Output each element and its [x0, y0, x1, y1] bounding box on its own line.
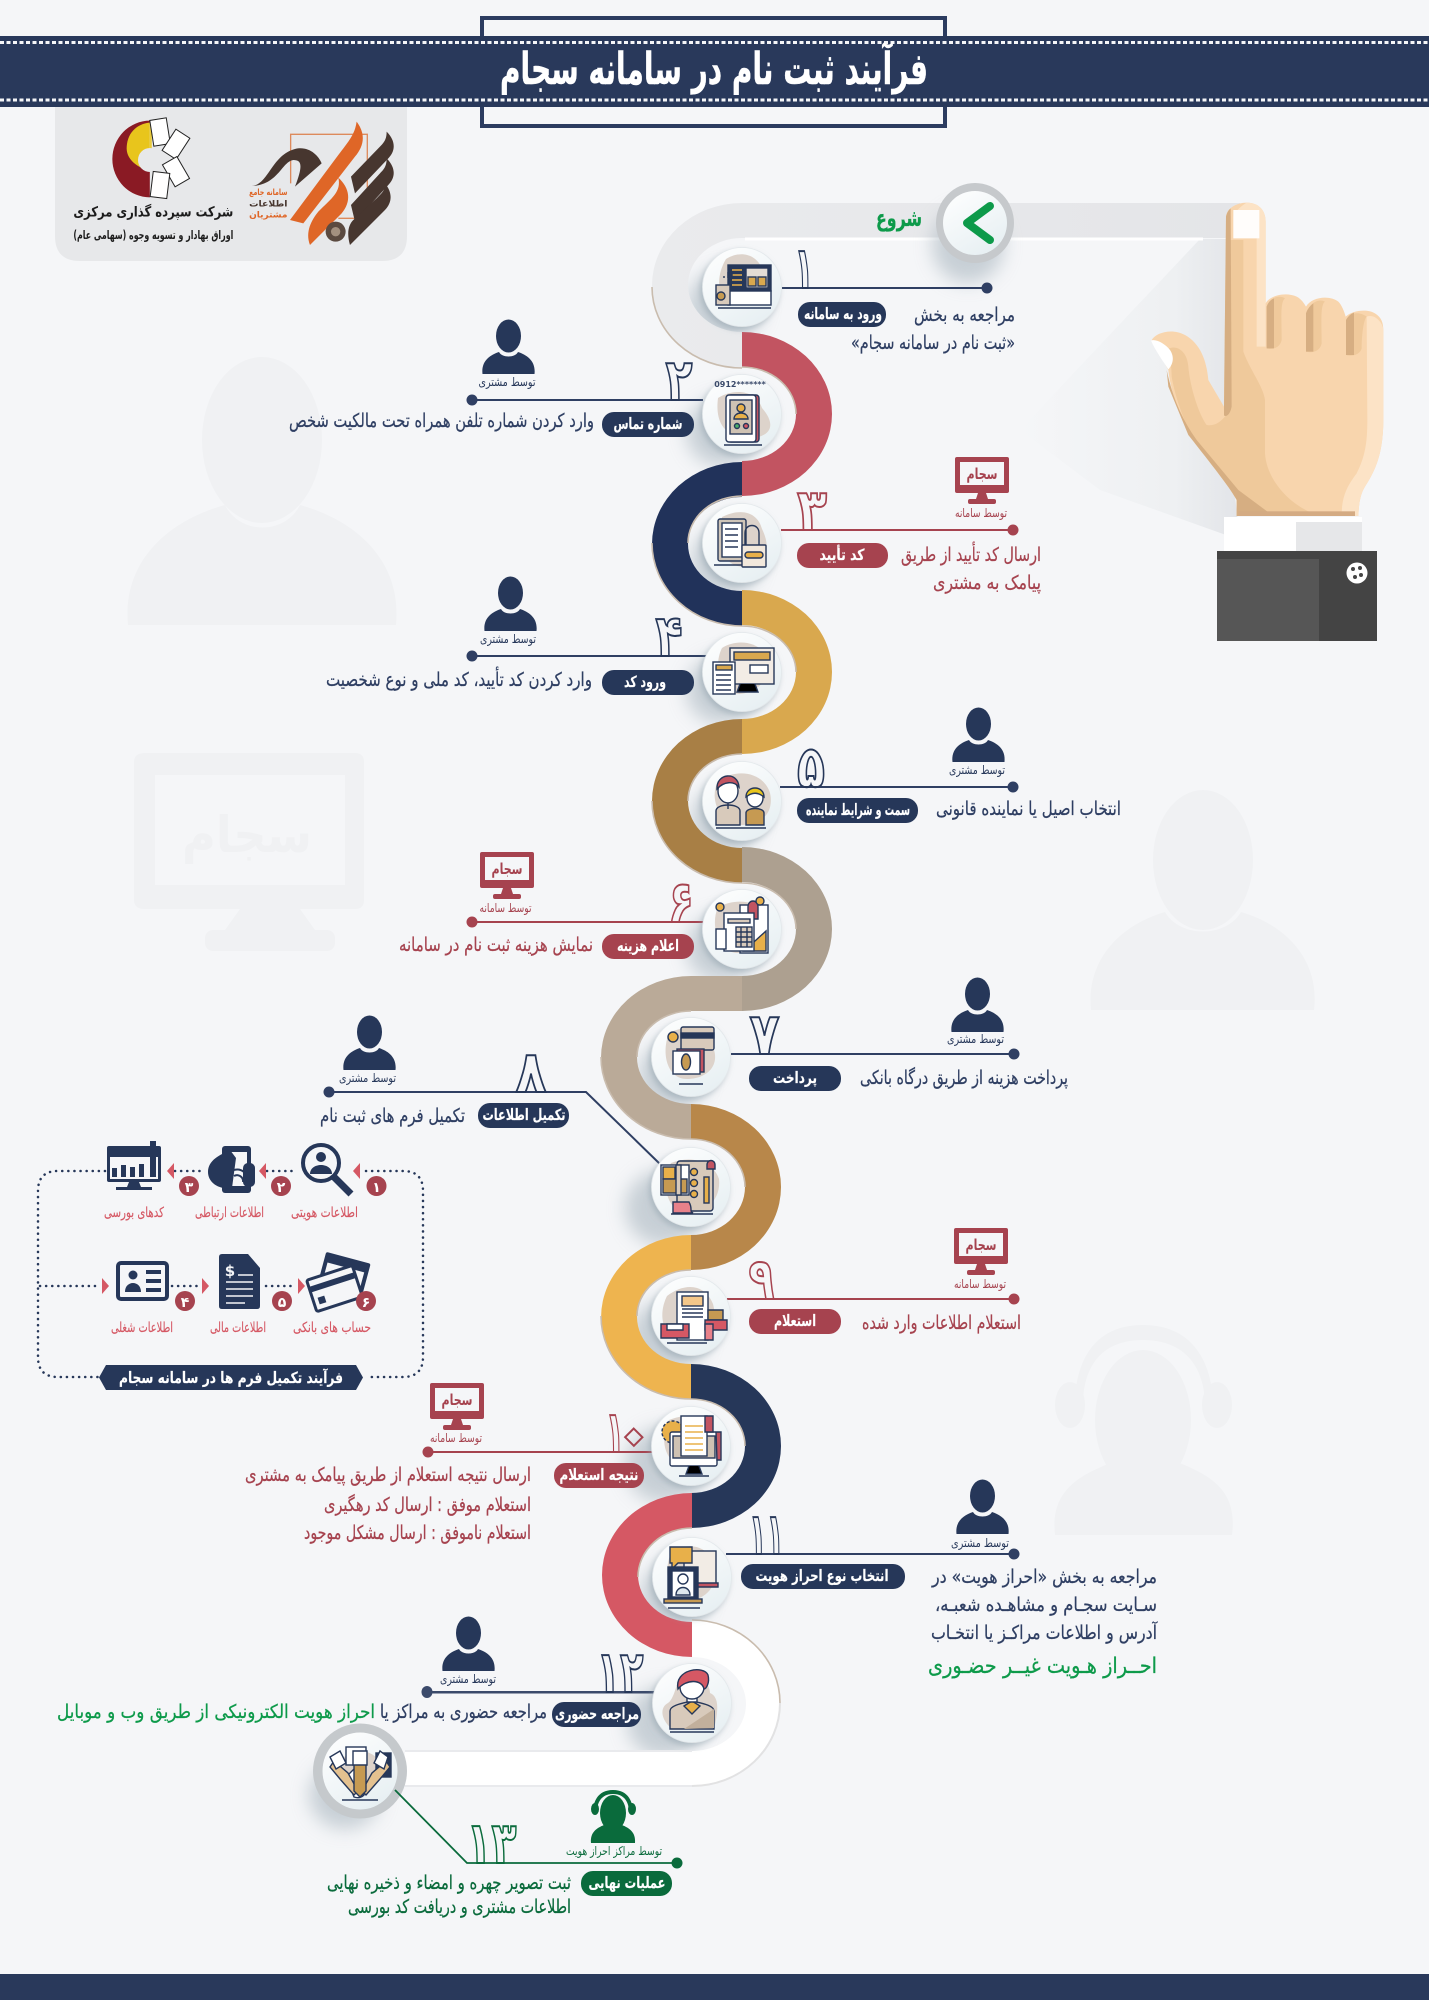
step 1	[702, 234, 1015, 354]
step 1 number: ۱	[794, 234, 814, 302]
step 1 pill	[798, 302, 886, 327]
step 11 connector line	[726, 1548, 1020, 1560]
step 9 text: استعلام اطلاعات وارد شده	[862, 1312, 1021, 1334]
step 3 text: ارسال کد تأیید از طریق	[901, 541, 1041, 566]
step 10 text: ارسال نتیجه استعلام از طریق پیامک به مشتری	[245, 1464, 531, 1486]
step 1 text	[851, 304, 1015, 354]
step 11 text: مراجعه به بخش «احراز هویت» در	[931, 1566, 1157, 1588]
watermark: person right	[1091, 790, 1315, 1010]
step 8 actor: customer	[339, 1016, 396, 1086]
step 10	[245, 1383, 730, 1544]
step 1 node icon	[702, 248, 782, 326]
step 4 actor: customer: توسط مشتری	[480, 632, 536, 647]
step 6 text: نمایش هزینه ثبت نام در سامانه	[399, 934, 593, 956]
item 4: job info: اطلاعات شغلی	[111, 1320, 173, 1336]
step 8 pill: تکمیل اطلاعات	[482, 1106, 566, 1124]
item 2: contact info: ۲	[277, 1180, 286, 1196]
step 9 pill	[749, 1309, 841, 1334]
step 10 number: ۱	[606, 1398, 624, 1466]
step 6 actor: system	[480, 852, 534, 916]
panel: form completion process	[38, 1141, 423, 1390]
step 6 pill	[602, 934, 694, 959]
step 2	[289, 320, 782, 454]
step 3 number: ۳	[797, 476, 827, 544]
step 6 node icon	[702, 890, 782, 968]
dotted frame	[38, 1171, 423, 1377]
shirt cuff	[1224, 517, 1362, 551]
item 6: bank accounts: ۶	[362, 1295, 370, 1311]
step 9 actor: system: توسط سامانه	[954, 1277, 1006, 1292]
step 7 pill	[749, 1066, 841, 1091]
ribbon: segment 4 to 5	[652, 719, 742, 883]
step 12 actor: customer: توسط مشتری	[440, 1672, 496, 1687]
logo: sejam: مشتریان	[249, 210, 287, 220]
logo: central securities depository: شرکت سپرده گذاری مرکزی	[73, 204, 233, 221]
step 11 actor: customer	[951, 1480, 1009, 1551]
step 2 connector line	[466, 394, 703, 406]
watermark: monitor	[134, 753, 364, 951]
step 8 connector line	[324, 1086, 661, 1165]
watermark: person left	[127, 357, 397, 625]
step 3 connector line	[781, 524, 1018, 536]
process banner	[99, 1365, 363, 1390]
ribbon: segment 7 to 8	[691, 1104, 781, 1270]
step 13 connector line	[395, 1790, 682, 1868]
step 13 actor: verification center: توسط مراکز احراز هویت	[566, 1844, 662, 1859]
start button	[876, 183, 1014, 283]
step 8 node icon	[652, 1148, 730, 1226]
step 3 pill: کد تأیید	[820, 545, 865, 564]
step 6 actor: system: سجام	[492, 860, 522, 878]
hand	[1151, 203, 1383, 516]
ribbon: segment 2 to 3	[652, 462, 742, 626]
step 10 text	[245, 1464, 531, 1544]
item 5: financial info: اطلاعات مالی	[210, 1320, 266, 1336]
logo: sejam	[249, 122, 394, 245]
step 13 number: ۱۳	[466, 1809, 516, 1877]
step 12 pill	[552, 1702, 641, 1727]
step 5	[702, 708, 1121, 840]
item 5: financial info: ۵	[278, 1295, 287, 1311]
step 10 node icon	[652, 1406, 730, 1486]
step 1 text: مراجعه به بخش	[914, 304, 1015, 326]
step 11 text: آدرس و اطلاعات مراکـز یا انتخـاب	[931, 1620, 1158, 1644]
step 9 node icon	[652, 1276, 730, 1356]
ribbon: segment 8 to 9	[601, 1235, 691, 1399]
item 1: identity info	[291, 1145, 386, 1221]
step 9 connector line	[727, 1294, 1020, 1304]
step 12 text: مراجعه حضوری به مراکز یا	[380, 1701, 547, 1723]
step 12 number: ۱۲	[596, 1638, 644, 1706]
ribbon: segment 10 to 11	[602, 1493, 692, 1657]
step 7 pill: پرداخت	[773, 1069, 817, 1088]
footer band	[0, 1974, 1429, 2000]
header: navy band with dashed lines	[0, 36, 1429, 107]
step 9 pill: استعلام	[774, 1312, 816, 1330]
step 5 number: ۵	[797, 733, 825, 801]
step 12 pill: مراجعه حضوری	[555, 1705, 639, 1723]
step 9 actor: system: سجام	[966, 1236, 996, 1254]
logo: central securities depository: اوراق بهادار و تسویه وجوه (سهامی عام)	[73, 228, 233, 243]
hand cast shadow	[1020, 239, 1240, 540]
step 12 node icon	[652, 1664, 732, 1742]
step 2 actor: customer: توسط مشتری	[478, 375, 536, 390]
step 6 pill: اعلام هزینه	[617, 937, 679, 955]
step 4 number: ۴	[656, 602, 682, 670]
step 7 actor: customer: توسط مشتری	[947, 1032, 1004, 1047]
ribbon: segment 9 to 10	[691, 1364, 781, 1528]
step 11 pill	[741, 1564, 905, 1589]
item 6: bank accounts: حساب های بانکی	[293, 1320, 371, 1336]
ribbon edge highlights	[601, 367, 796, 1577]
panel: logos	[55, 107, 407, 261]
step 3 text: پیامک به مشتری	[933, 572, 1041, 594]
step 1 text: «ثبت نام در سامانه سجام»	[851, 332, 1015, 354]
step 10 actor: system: توسط سامانه	[430, 1431, 482, 1446]
step 7 number: ۷	[750, 1000, 780, 1068]
step 5 text: انتخاب اصیل یا نماینده قانونی	[936, 798, 1121, 820]
step 3 actor: system: توسط سامانه	[955, 506, 1007, 521]
step 5 actor: customer	[949, 708, 1005, 778]
ribbon: segment 1 to 2	[742, 332, 832, 496]
step 11 text: احــراز هـویت غیــر حضـوری	[928, 1654, 1157, 1679]
step 10 text: استعلام ناموفق : ارسال مشکل موجود	[304, 1522, 531, 1544]
watermark: monitor: سجام	[182, 806, 312, 864]
step 4 text: وارد کردن کد تأیید، کد ملی و نوع شخصیت	[326, 666, 592, 691]
arrows	[102, 1163, 360, 1294]
step 11 pill: انتخاب نوع احراز هویت	[756, 1567, 888, 1585]
item 1: identity info: اطلاعات هویتی	[291, 1205, 358, 1221]
ribbon: segment 3 to 4	[742, 590, 832, 754]
step 8	[320, 1016, 730, 1226]
step 4 actor: customer	[480, 576, 537, 647]
step 13 text: ثبت تصویر چهره و امضاء و ذخیره نهایی	[327, 1872, 571, 1894]
step 7 text: پرداخت هزینه از طریق درگاه بانکی	[860, 1066, 1068, 1089]
step 10 actor: system: سجام	[442, 1391, 472, 1409]
step 5 pill: سمت و شرایط نماینده	[806, 801, 910, 819]
step 7	[652, 978, 1068, 1096]
step 13 actor: verification center	[566, 1790, 662, 1859]
step 2 actor: customer	[478, 320, 536, 390]
step 2 pill	[602, 412, 694, 437]
step 9 number: ۹	[748, 1245, 774, 1313]
step 13 pill: عملیات نهایی	[588, 1874, 666, 1892]
node shadows	[309, 269, 763, 1829]
step 12 actor: customer	[440, 1616, 496, 1687]
step 3 actor: system	[955, 457, 1009, 521]
logo: sejam: سامانه جامع	[249, 188, 287, 198]
watermark: headset agent	[1054, 1325, 1233, 1535]
step 7 connector line	[731, 1048, 1020, 1060]
step 10 number: ۰	[592, 1389, 682, 1479]
step 6	[399, 852, 782, 968]
step 13 final node	[313, 1724, 407, 1818]
logo: sejam: اطلاعات	[249, 199, 288, 209]
step 1 connector line	[782, 282, 992, 294]
step 4	[326, 576, 782, 712]
step 13	[327, 1790, 682, 1918]
step 3 actor: system: سجام	[966, 465, 998, 483]
step 10 actor: system	[430, 1383, 484, 1446]
step 11	[652, 1480, 1158, 1679]
process banner: فرآیند تکمیل فرم ها در سامانه سجام	[119, 1368, 343, 1387]
step 13 text	[327, 1872, 571, 1918]
jacket sleeve	[1217, 551, 1377, 641]
step 5 pill	[797, 798, 918, 823]
step 11 text	[928, 1566, 1158, 1679]
step 4 connector line	[466, 650, 706, 662]
item 5: financial info: $	[225, 1262, 235, 1280]
step 11 actor: customer: توسط مشتری	[951, 1536, 1009, 1551]
step 4 node icon	[702, 632, 782, 712]
header: title frame behind band	[482, 18, 945, 126]
step 3 node icon	[702, 504, 782, 582]
item 6: bank accounts	[293, 1252, 376, 1336]
step 6 connector line	[466, 916, 703, 928]
step 8 text: تکمیل فرم های ثبت نام	[320, 1105, 465, 1127]
step 4 pill	[602, 670, 694, 695]
step 8 number: ۸	[516, 1038, 546, 1106]
step 5 node icon	[702, 762, 782, 840]
step 2 node icon: 0912*******	[714, 380, 767, 389]
step 11 text: سـایت سجـام و مشاهـده شعبـه،	[935, 1594, 1157, 1616]
step 10 text: استعلام موفق : ارسال کد رهگیری	[324, 1493, 531, 1516]
step 8 actor: customer: توسط مشتری	[339, 1071, 396, 1086]
item 3: exchange codes	[104, 1141, 199, 1221]
step 12	[57, 1616, 732, 1742]
step 10 pill	[554, 1463, 644, 1488]
item 3: exchange codes: ۳	[185, 1180, 194, 1196]
step 11 node icon	[652, 1538, 732, 1616]
step 10 connector line	[422, 1446, 652, 1458]
step 6 number: ۶	[668, 868, 694, 936]
step 9	[652, 1228, 1021, 1356]
step 12 connector line	[422, 1686, 654, 1698]
item 2: contact info	[195, 1146, 291, 1221]
start label: شروع	[876, 206, 922, 232]
ribbon: white end band	[405, 1620, 780, 1786]
step 9 actor: system	[954, 1228, 1008, 1292]
step 13 pill	[581, 1871, 672, 1896]
logo: central securities depository	[73, 118, 233, 243]
item 1: identity info: ۱	[372, 1180, 381, 1196]
step 5 connector line	[780, 782, 1018, 792]
step 8 pill	[478, 1103, 569, 1128]
step 3	[702, 457, 1041, 594]
item 4: job info	[111, 1263, 195, 1336]
step 5 actor: customer: توسط مشتری	[949, 763, 1005, 778]
item 2: contact info: اطلاعات ارتباطی	[195, 1205, 264, 1221]
item 5: financial info	[210, 1254, 292, 1336]
step 3 pill	[797, 543, 888, 568]
step 4 pill: ورود کد	[624, 673, 666, 691]
step 10 pill: نتیجه استعلام	[560, 1466, 638, 1484]
ribbon: segment 5 to 6	[742, 847, 832, 1011]
step 6 actor: system: توسط سامانه	[480, 901, 532, 916]
step 2 number: ۲	[666, 346, 692, 414]
step 13 text: اطلاعات مشتری و دریافت کد بورسی	[348, 1896, 571, 1918]
step 2 pill: شماره تماس	[614, 415, 682, 433]
step 11: ۱۱	[749, 1500, 784, 1568]
step 7 actor: customer	[947, 978, 1004, 1047]
step 7 node icon	[652, 1018, 730, 1096]
step 2 text: وارد کردن شماره تلفن همراه تحت مالکیت شخص	[289, 410, 594, 432]
title: فرآیند ثبت نام در سامانه سجام	[500, 41, 928, 95]
ribbon: shift to lower column	[601, 976, 742, 1139]
step 12 text: احراز هویت الکترونیکی از طریق وب و موبایل	[57, 1701, 375, 1723]
step 3 text	[901, 541, 1041, 594]
step 1 pill: ورود به سامانه	[804, 305, 882, 323]
ribbon: start grey band	[652, 203, 1240, 368]
item 4: job info: ۴	[181, 1295, 190, 1311]
item 3: exchange codes: کدهای بورسی	[104, 1205, 164, 1221]
step 2 node icon	[702, 374, 782, 454]
